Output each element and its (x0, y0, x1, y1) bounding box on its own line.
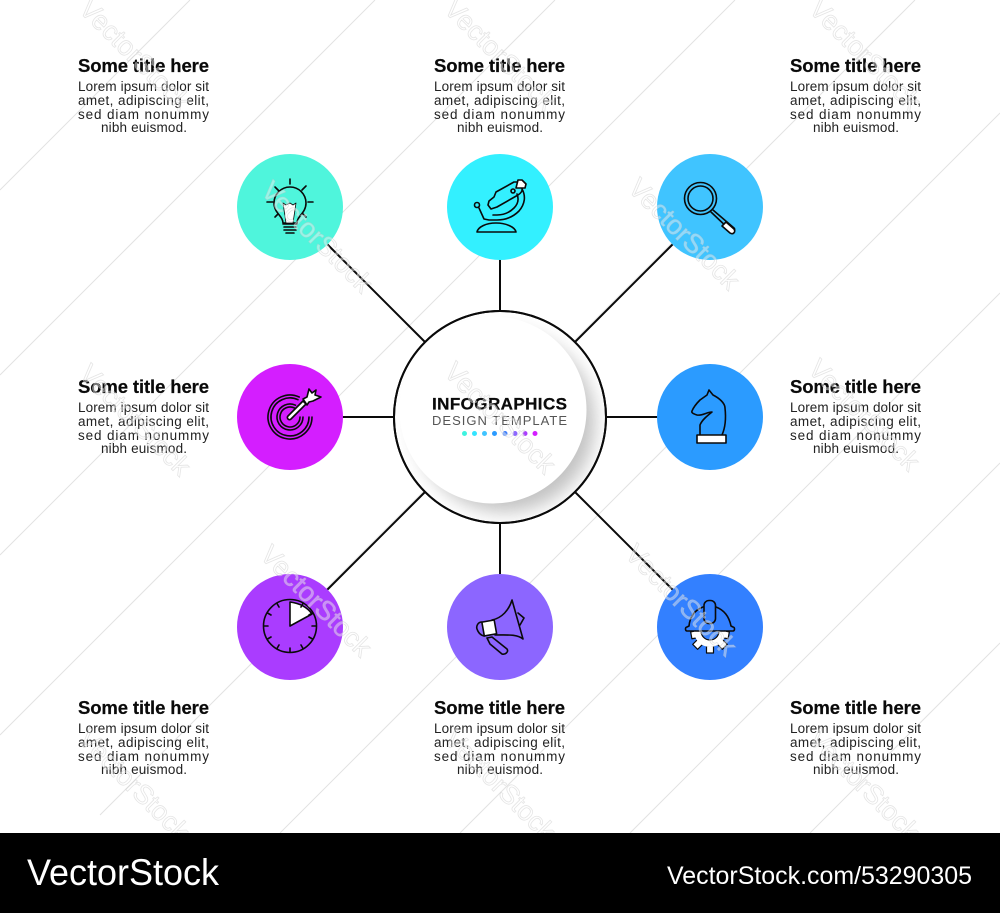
connector lines (327, 243, 674, 591)
node: chess knight (657, 364, 763, 470)
central circle (394, 311, 606, 523)
watermark: VectorStock (254, 539, 378, 663)
footer logo: VectorStock (27, 852, 219, 893)
color dots (462, 431, 538, 436)
icon: magnifier (684, 182, 735, 234)
text block: middle left (78, 376, 209, 456)
watermark: VectorStock (622, 172, 746, 296)
text block: middle right (790, 376, 921, 456)
node: light bulb (237, 154, 343, 260)
text block: bottom left (78, 697, 209, 777)
node: clock (237, 574, 343, 680)
watermark: VectorStock (438, 723, 562, 847)
icon: clock (264, 600, 316, 652)
text block: bottom center (434, 697, 565, 777)
node: target (237, 364, 343, 470)
icon: chess knight (692, 390, 726, 443)
watermark: VectorStock (72, 723, 196, 847)
text block: top right (790, 55, 921, 135)
text block: bottom right (790, 697, 921, 777)
watermark: VectorStock (255, 175, 379, 299)
footer bar (0, 833, 1000, 913)
watermark (72, 0, 927, 847)
icon: light bulb (267, 179, 313, 233)
watermark: VectorStock (438, 356, 562, 480)
watermark: VectorStock (73, 358, 197, 482)
center title: INFOGRAPHICS (432, 394, 567, 414)
icon: megaphone (477, 600, 524, 654)
node: magnifier (657, 154, 763, 260)
node: megaphone (447, 574, 553, 680)
icon: target with dart (268, 389, 321, 439)
icon: helmet and gear (686, 600, 734, 653)
text block: top center (434, 55, 565, 135)
node: helmet gear (657, 574, 763, 680)
footer id: VectorStock.com/53290305 (667, 862, 972, 890)
watermark: VectorStock (802, 723, 926, 847)
watermark: VectorStock (619, 538, 743, 662)
center subtitle: DESIGN TEMPLATE (432, 413, 567, 428)
text block: top left (78, 55, 209, 135)
node: microscope (447, 154, 553, 260)
watermark: VectorStock (802, 353, 926, 477)
icon: microscope (474, 180, 526, 232)
